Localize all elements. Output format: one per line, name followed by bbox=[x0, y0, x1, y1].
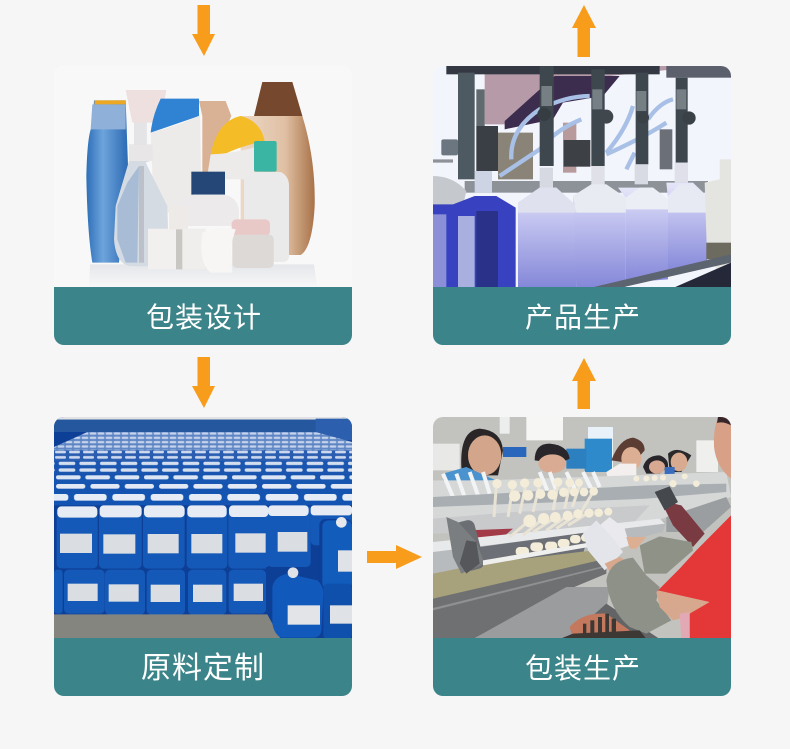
arrow: middle down bbox=[192, 357, 215, 408]
label: 包装设计 bbox=[54, 287, 352, 345]
label: 包装设计: 包装设计 bbox=[146, 302, 262, 333]
worker silhouettes bbox=[461, 429, 503, 475]
image: blue chemical drums bbox=[54, 417, 352, 638]
label: 包装生产: 包装生产 bbox=[525, 653, 641, 684]
machine bbox=[433, 472, 731, 532]
panel: raw material customization bbox=[54, 417, 352, 696]
white handles with beads bbox=[494, 485, 593, 537]
label: 包装生产 bbox=[433, 638, 731, 696]
arrow: middle up bbox=[572, 358, 596, 409]
arrow: right bbox=[367, 545, 422, 569]
label: 原料定制 bbox=[54, 638, 352, 696]
panel: packaging production bbox=[433, 417, 731, 696]
arrow: top incoming down bbox=[192, 5, 215, 56]
label: 原料定制: 原料定制 bbox=[141, 652, 265, 685]
label: 产品生产 bbox=[433, 287, 731, 345]
panel: product manufacturing bbox=[433, 66, 731, 345]
gloves and arms bbox=[665, 502, 705, 547]
image: factory workers at production line bbox=[433, 417, 731, 638]
image: filling machine bbox=[433, 66, 731, 287]
label: 产品生产: 产品生产 bbox=[525, 302, 641, 333]
image: cosmetic bottles bbox=[86, 82, 317, 286]
arrow: top outgoing up bbox=[572, 5, 596, 57]
panel: packaging design bbox=[54, 66, 352, 345]
